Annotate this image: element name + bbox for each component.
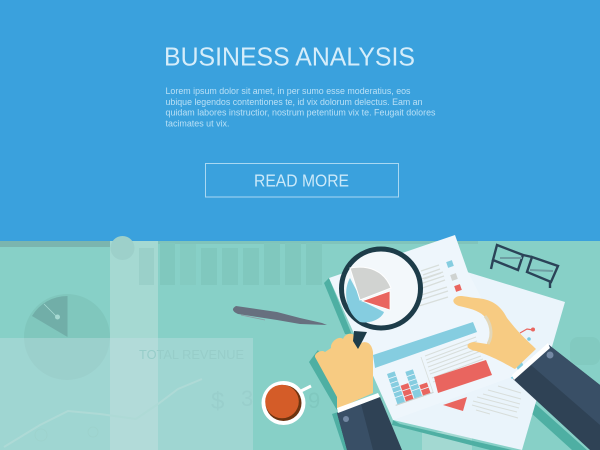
red triangle [443,397,467,411]
faded line chart [4,379,202,447]
red line marks [520,329,533,333]
faded revenue panel: 9 [308,388,320,413]
bar chart [385,362,434,406]
magnified pie [346,267,391,323]
body text: quidam labores instructior, nostrum petentium vix te. Feugait dolores [166,108,436,118]
body text: Lorem ipsum dolor sit amet, in per sumo esse moderatius, eos [166,86,411,97]
legend squares [446,260,454,268]
read more button [206,164,398,197]
front report sheet [329,235,521,420]
faded revenue panel [0,338,320,450]
pen [233,306,327,325]
faded pie chart [24,294,110,380]
right hand [453,296,536,369]
faded circle [110,236,134,260]
body text: tacimates ut vix. [166,118,230,130]
faded right blocks [570,337,600,365]
faded revenue panel: 3 [241,386,253,411]
coffee cup [262,381,311,425]
header panel [0,0,600,241]
glasses [491,245,558,288]
top dark strip [0,241,110,247]
light vertical column [110,241,158,450]
faded bar chart [139,243,322,285]
body text: ubique legendos contentiones te, id vix dolorum delectus. Eam an [166,97,422,108]
desk background [0,240,600,450]
total revenue label: TOTAL REVENUE [139,347,244,362]
blue header bar [373,322,477,368]
left sleeve [337,393,402,450]
grey text block [425,337,483,382]
back report sheet [393,272,565,450]
paper shadows [309,278,587,450]
faded amount: $ [211,388,224,415]
grey lines lower [472,386,521,418]
red bar [434,360,492,393]
lens [342,249,420,328]
legend lines [409,265,448,306]
magnifier handle [353,331,367,349]
faded dashboard background [0,236,600,450]
chart divider [421,357,433,392]
body text [166,86,436,130]
right sleeve [512,343,600,450]
read more button: READ MORE [254,170,349,190]
magnifier [342,249,420,349]
title: BUSINESS ANALYSIS [164,44,415,72]
left hand [315,334,373,409]
blue stripe [499,356,527,379]
